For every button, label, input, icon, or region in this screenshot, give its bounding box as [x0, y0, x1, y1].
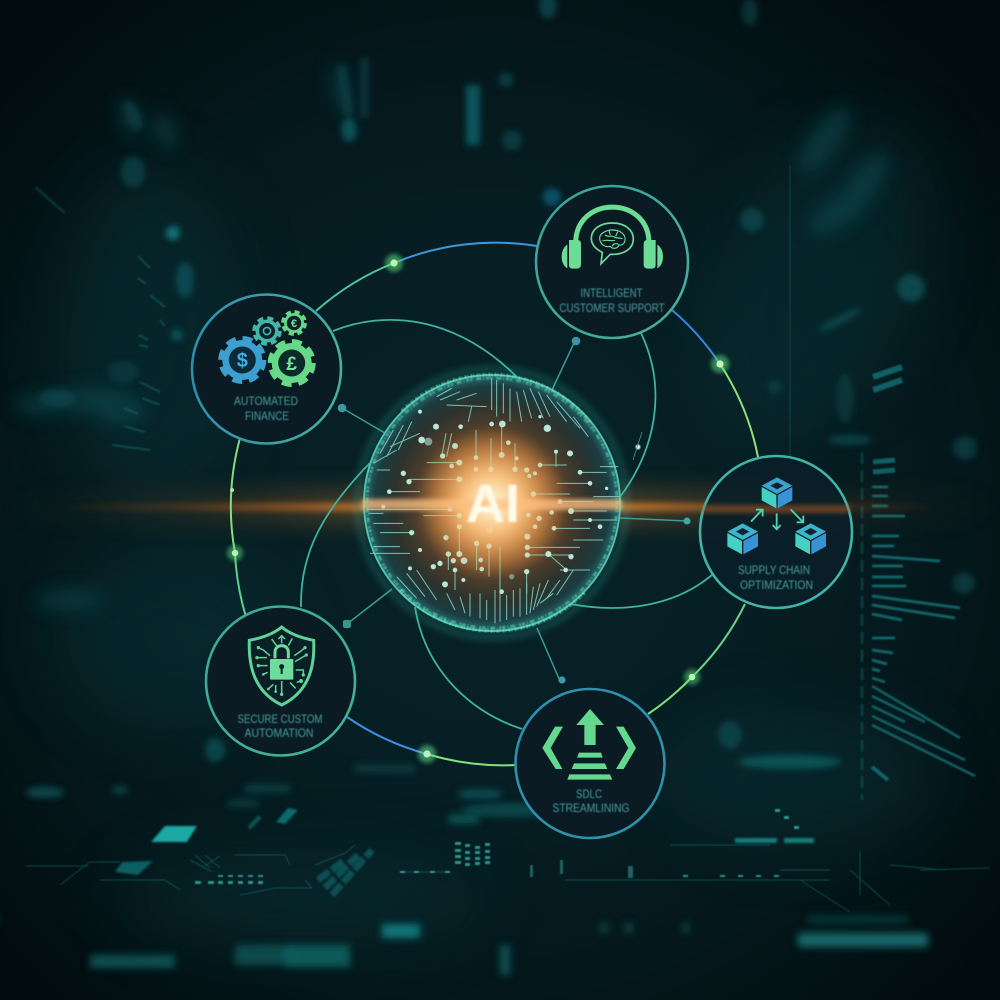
icon: finance gears: $ [237, 350, 248, 372]
label: supply chain optimization: OPTIMIZATION [740, 578, 813, 592]
icon: finance gears [221, 312, 313, 384]
background: left column of code lines [35, 187, 165, 450]
icon: headset with brain speech bubble [562, 207, 663, 269]
panel: secure custom automation [206, 606, 355, 756]
label: secure custom automation: AUTOMATION [244, 726, 314, 740]
panel: supply chain optimization [700, 456, 852, 608]
panel: automated finance [192, 294, 341, 444]
background: floor circuit traces and dots [26, 845, 990, 912]
label: supply chain optimization: SUPPLY CHAIN [738, 563, 810, 577]
central AI sphere [358, 369, 626, 637]
label: automated finance: FINANCE [245, 409, 289, 423]
icon: finance gears: £ [286, 354, 297, 375]
AI label: AI [466, 474, 520, 534]
icon: connected cubes [727, 477, 826, 554]
panel: sdlc streamlining [516, 689, 664, 838]
label: sdlc streamlining: STREAMLINING [552, 801, 630, 815]
orbit ring segments [231, 243, 758, 765]
label: intelligent customer support: CUSTOMER SUPPORT [560, 301, 665, 315]
background: right column of code lines [862, 367, 975, 800]
background: vertical hairline [789, 165, 791, 470]
icon: circuit shield with padlock [249, 627, 314, 705]
sphere circuit network [367, 378, 620, 623]
label: automated finance: AUTOMATED [234, 394, 298, 408]
inner connector arcs [301, 320, 712, 729]
spokes with end nodes [338, 337, 690, 684]
panel: intelligent customer support [536, 186, 688, 338]
sphere inner flare [362, 499, 622, 510]
label: intelligent customer support: INTELLIGENT [580, 286, 643, 300]
icon: code brackets with upward arrow and steps [542, 709, 636, 780]
label: secure custom automation: SECURE CUSTOM [238, 712, 323, 726]
glowing orbit nodes [227, 254, 729, 763]
icon: finance gears: € [291, 318, 297, 330]
horizontal orange light flare [0, 490, 1000, 524]
label: sdlc streamlining: SDLC [576, 787, 602, 801]
